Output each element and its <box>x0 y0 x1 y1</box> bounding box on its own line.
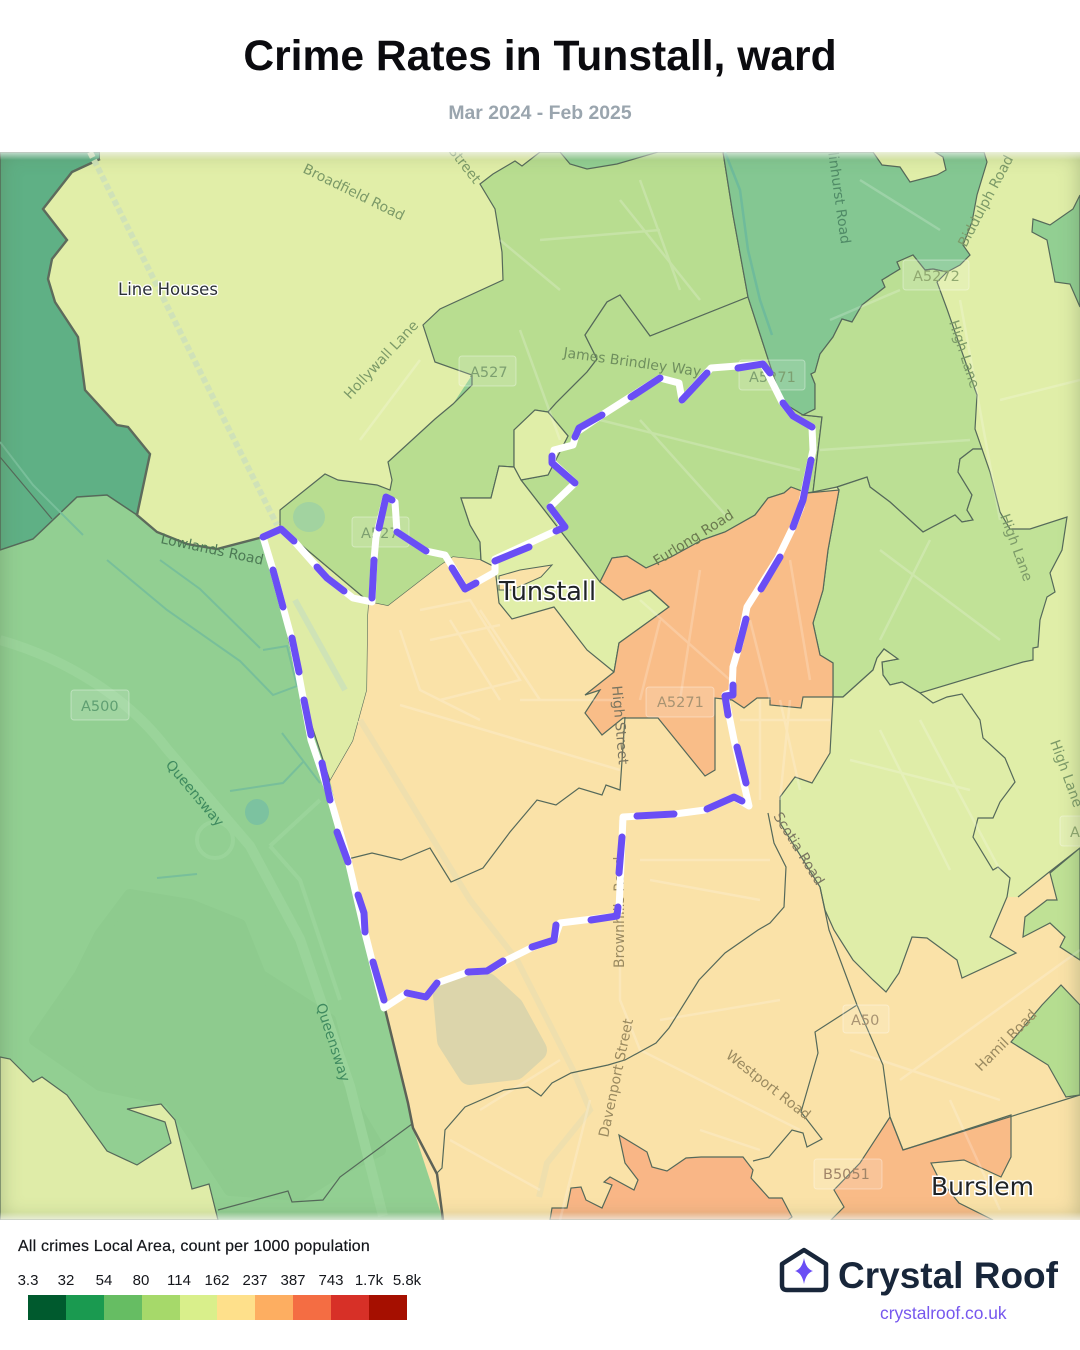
website address: crystalroof.co.uk <box>880 1303 1007 1323</box>
road and place labels: Biddulph Road <box>955 153 1017 250</box>
region: orange high crime area central <box>585 487 839 776</box>
legend value labels: 743 <box>318 1272 344 1289</box>
label: Tunstall: Tunstall <box>498 577 596 607</box>
title: Crime Rates in Tunstall, ward <box>243 32 837 80</box>
pond <box>293 502 325 532</box>
region: pale green island north of Tunstall <box>514 410 568 480</box>
region: orange Burslem <box>831 1115 1011 1220</box>
ward boundary lines in sand area <box>0 457 1080 1220</box>
region: dark green north-east <box>723 152 987 415</box>
region: orange south <box>550 1135 792 1220</box>
road and place labels: Lowlands Road <box>159 531 265 569</box>
legend value labels: 5.8k <box>393 1272 421 1289</box>
region: green lower right <box>1023 848 1080 960</box>
legend value labels: 54 <box>96 1272 112 1289</box>
legend value labels: 114 <box>167 1272 191 1289</box>
road and place labels: Davenport Street <box>596 1017 637 1139</box>
road and place labels: Hollywall Lane <box>341 318 422 403</box>
road and place labels: Broadfield Road <box>300 161 407 224</box>
roads and waterways network <box>0 152 1080 1220</box>
legend colour scale <box>28 1295 407 1320</box>
choropleth map <box>0 152 1080 1220</box>
legend value labels <box>18 1272 422 1289</box>
road and place labels: James Brindley Way <box>561 345 702 380</box>
road and place labels: A500 <box>81 699 119 715</box>
legend title: All crimes Local Area, count per 1000 population <box>18 1238 370 1255</box>
road and place labels: Queensway <box>162 757 227 830</box>
lake, grey patch <box>445 985 535 1073</box>
road shields <box>71 260 1080 1189</box>
logo: Crystal Roof <box>780 1248 1058 1323</box>
road and place labels: Hamil Road <box>973 1007 1040 1075</box>
region: green north of Tunstall <box>521 295 822 582</box>
road and place labels: Furlong Road <box>651 507 737 569</box>
region: pale green far east boundary <box>1018 848 1080 897</box>
region: pale green centre of Tunstall <box>461 466 669 672</box>
pond beside Queensway <box>245 799 269 825</box>
region: north-west dark green <box>0 152 150 550</box>
region: Line Houses pale green <box>43 152 540 549</box>
label: Burslem: Burslem <box>931 1172 1034 1201</box>
Line Houses western boundary <box>43 159 263 549</box>
region: eastern pale green <box>819 152 1080 897</box>
map edge shading <box>0 152 1080 1220</box>
road and place labels: High Lane <box>996 512 1035 584</box>
road and place labels <box>81 128 1080 1183</box>
icon: house with star <box>780 1248 828 1292</box>
road and place labels: Westport Road <box>723 1048 813 1123</box>
ward outline: white base line <box>263 364 813 1008</box>
legend <box>18 1238 422 1320</box>
road and place labels: A527 <box>470 365 508 381</box>
region: south-west pale green <box>0 1057 218 1220</box>
map base: western green area <box>0 152 656 1220</box>
road and place labels: High Street <box>608 685 631 766</box>
road and place labels: Scotia Road <box>770 810 827 888</box>
road and place labels: A50 <box>851 1013 879 1029</box>
region: north central green around A527 <box>280 152 748 606</box>
ward outline: purple dashes <box>263 364 812 1000</box>
label: Line Houses: Line Houses <box>118 280 218 299</box>
region: sand patch by Tunstall label <box>499 565 552 590</box>
road and place labels: B5051 <box>823 1167 870 1183</box>
road and place labels: A5271 <box>749 370 796 386</box>
region: sand, mid crime rate area <box>330 557 1080 1220</box>
legend value labels: 162 <box>204 1272 230 1289</box>
legend value labels: 1.7k <box>355 1272 383 1289</box>
legend value labels: 387 <box>280 1272 306 1289</box>
road and place labels: A5271 <box>657 695 704 711</box>
road and place labels: A527 <box>361 526 399 542</box>
legend value labels: 80 <box>133 1272 149 1289</box>
region: green north-east <box>803 255 982 532</box>
region: pale green south-east <box>780 649 1016 992</box>
road and place labels: A <box>1070 825 1080 841</box>
road and place labels: High Lane <box>945 318 982 390</box>
legend value labels: 32 <box>58 1272 74 1289</box>
region: green top right corner <box>1032 195 1080 307</box>
road and place labels: Brownhills Road <box>612 857 628 968</box>
region: green near Hamil Road <box>1011 985 1080 1097</box>
woodland patch in western green <box>35 895 380 1195</box>
region: green east <box>813 449 1067 697</box>
subtitle: date range: Mar 2024 - Feb 2025 <box>448 102 632 124</box>
road and place labels: Hollinhurst Road <box>821 128 853 245</box>
road and place labels: Queensway <box>312 1001 353 1084</box>
road and place labels: Street <box>445 144 484 187</box>
legend value labels: 237 <box>242 1272 268 1289</box>
legend value labels: 3.3 <box>18 1272 38 1289</box>
road and place labels: A5272 <box>913 269 960 285</box>
region: pale green wedge by railway <box>263 527 369 781</box>
wordmark: Crystal Roof <box>838 1255 1058 1296</box>
map top edge fade <box>0 152 1080 160</box>
map bottom edge fade <box>0 1212 1080 1220</box>
